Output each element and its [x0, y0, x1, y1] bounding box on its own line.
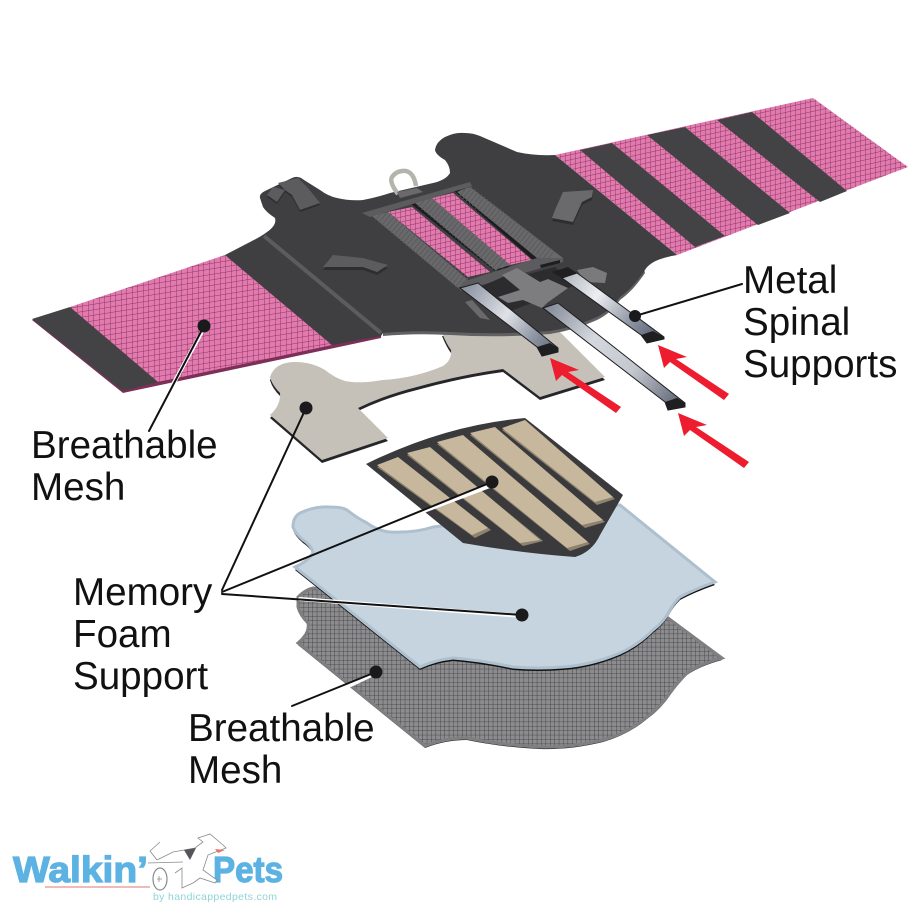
layer: harness body: [32, 98, 908, 393]
label: breathable mesh upper: Mesh: [31, 466, 125, 509]
metal bar right: [552, 267, 664, 343]
label: metal spinal supports: Metal: [743, 259, 837, 302]
cross connector: [498, 268, 568, 308]
label: metal spinal supports: Spinal: [743, 301, 850, 344]
layer: blue memory foam sheet: [293, 505, 715, 671]
label: memory foam support: Memory: [73, 571, 213, 614]
buckles: [267, 178, 593, 275]
metal bar centre: [543, 303, 685, 410]
arrow 1: [550, 358, 621, 413]
red arrows: [550, 345, 749, 468]
pink windows: [388, 193, 532, 277]
label: memory foam support: Support: [73, 655, 208, 698]
metal bar left: [460, 283, 558, 356]
layer: foam strips on dark backing: [366, 418, 623, 557]
logo tagline: by handicappedpets.com: [153, 891, 277, 903]
recessed shadow behind connector: [480, 267, 575, 315]
arrow 2: [658, 345, 729, 400]
logo: Walkin' Pets: [13, 834, 283, 903]
side buckles: [577, 267, 607, 283]
label: memory foam support: Foam: [73, 613, 172, 656]
label: breathable mesh lower: Breathable: [188, 707, 375, 750]
d-ring: [391, 171, 416, 194]
layer: beige foam support: [270, 332, 605, 463]
seam line: [264, 236, 381, 333]
logo wordmark Walkin: Walkin’: [13, 849, 148, 890]
logo underline: [45, 886, 150, 888]
black gaps behind webbing: [410, 190, 540, 272]
logo wordmark Pets: Pets: [213, 849, 283, 890]
metal spinal supports: [460, 267, 685, 410]
label: breathable mesh lower: Mesh: [188, 749, 282, 792]
body panel rim: [383, 253, 645, 336]
label: breathable mesh upper: Breathable: [31, 424, 218, 467]
arrow 3: [678, 413, 749, 468]
body panel: [225, 133, 677, 345]
layer: lower breathable mesh: [298, 588, 722, 749]
right strap: [555, 98, 908, 255]
left strap: [32, 255, 381, 393]
webbing frame: [362, 182, 563, 291]
logo dog in wheelchair: [148, 834, 226, 890]
leader lines and dots: [149, 284, 742, 706]
label: metal spinal supports: Supports: [743, 343, 897, 386]
